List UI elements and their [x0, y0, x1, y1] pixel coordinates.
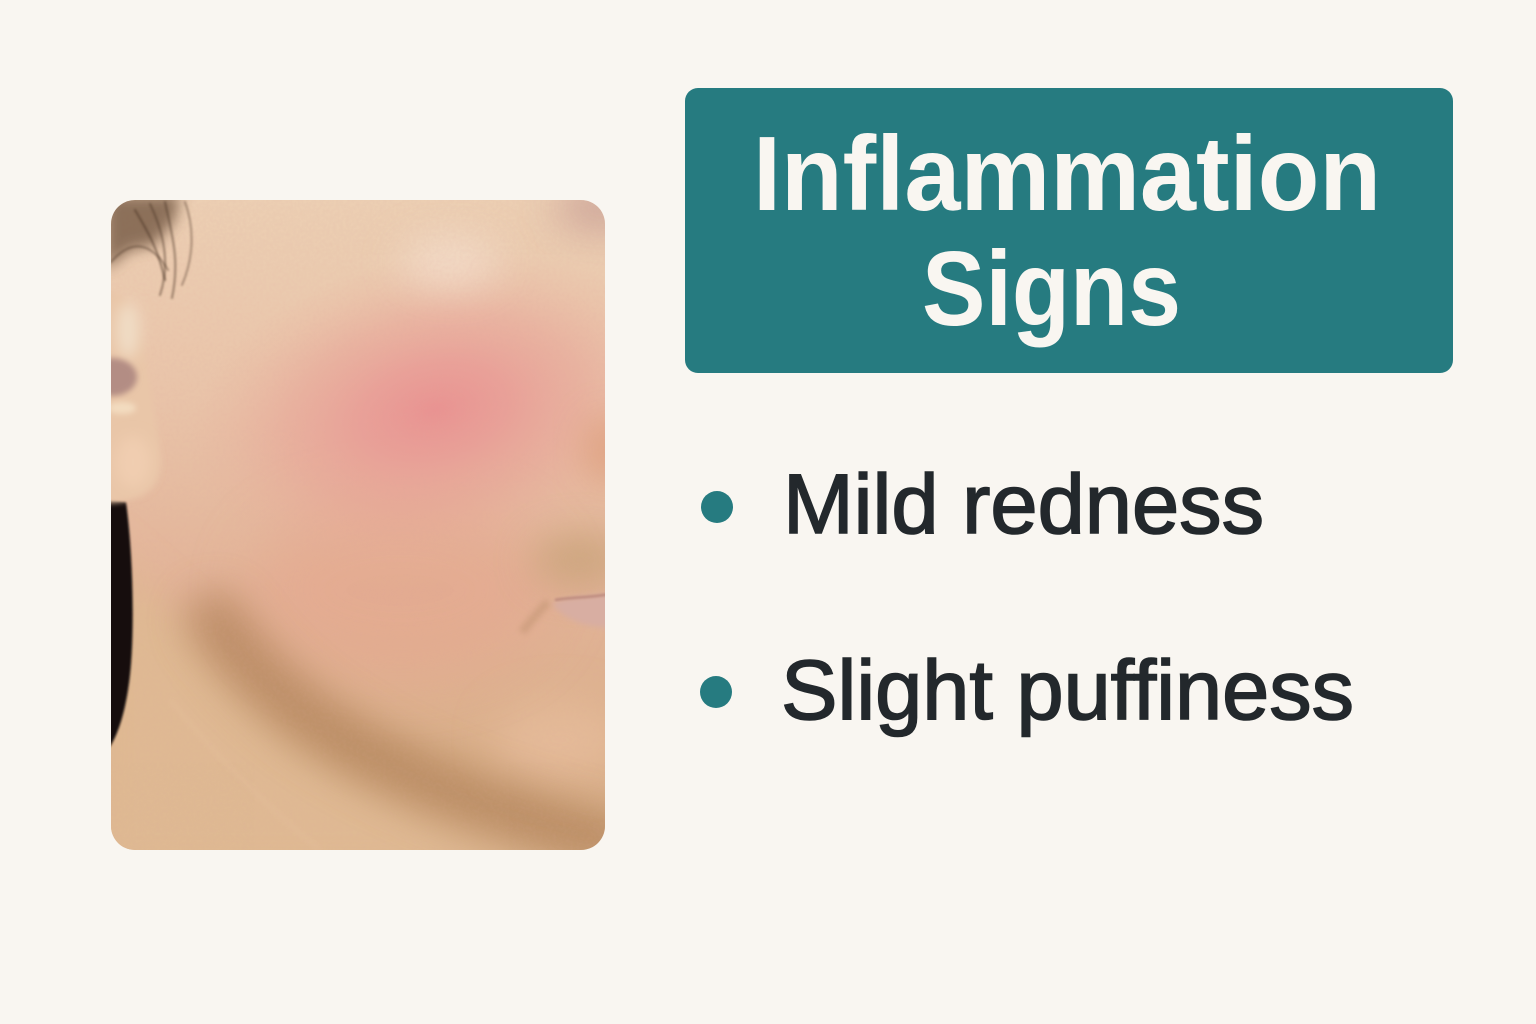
lower chin highlight — [508, 714, 605, 774]
bullet text: Mild redness — [783, 457, 1264, 551]
bullet dot — [701, 491, 733, 523]
title: line 2: Signs — [922, 230, 1181, 348]
bullet text: Slight puffiness — [781, 643, 1354, 737]
upper right shadow — [549, 200, 605, 245]
neck tone — [111, 647, 300, 850]
title: line 1: Inflammation — [753, 115, 1381, 233]
bullet item: mild redness — [701, 457, 1264, 551]
bullet dot — [700, 676, 732, 708]
hair wisps at temple — [105, 195, 192, 298]
neck crease — [170, 700, 320, 850]
black hair behind neck — [111, 500, 134, 748]
right edge orange tone — [576, 411, 605, 488]
lips — [522, 593, 612, 632]
ear — [111, 303, 158, 508]
nose-side olive shading — [532, 534, 628, 586]
title panel — [685, 88, 1453, 373]
photo: cheek with mild redness — [111, 200, 605, 850]
redness patch — [249, 284, 605, 512]
mid cheek warmth — [314, 542, 489, 578]
jaw shadow — [215, 620, 610, 842]
bullet item: slight puffiness — [700, 643, 1354, 737]
skin texture — [111, 200, 605, 850]
forehead-side highlight — [400, 236, 500, 288]
